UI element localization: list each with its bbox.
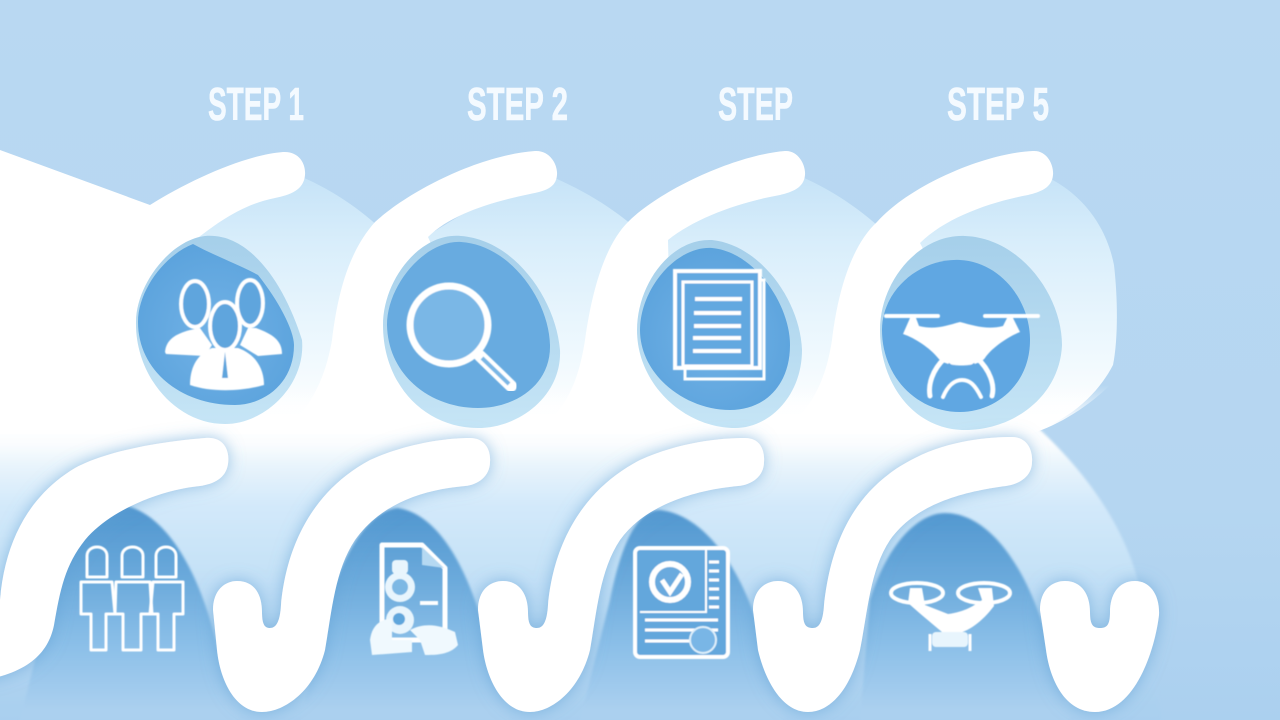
panel: step 1 drop [136, 236, 302, 424]
panel: lower blue arches [20, 505, 1070, 720]
heading: step labels [208, 78, 1049, 130]
panel: lower white arms [0, 437, 1159, 712]
icon: certificate with check [635, 548, 728, 657]
icon: team of three people [165, 280, 282, 390]
panel: lower pale wave [0, 425, 1165, 720]
panel: step 2 drop [383, 236, 560, 428]
heading: step labels: STEP 5 [947, 78, 1049, 130]
panel: upper white arms [0, 150, 1053, 434]
icon: document stack [675, 271, 764, 379]
white band blend [0, 385, 1110, 434]
panel: step 4 drop [880, 236, 1062, 430]
heading: step labels: STEP 2 [467, 78, 568, 130]
icon: magnifying glass [410, 286, 511, 386]
panel: upper pale lobes [170, 170, 1117, 432]
heading: step labels: STEP [718, 78, 793, 130]
icon: document with camera and hands [370, 545, 458, 655]
panel: step 3 drop [637, 240, 802, 428]
icon: three standing figures [81, 547, 183, 650]
icon: small drone from above [891, 583, 1010, 651]
icon: drone [886, 316, 1038, 397]
heading: step labels: STEP 1 [208, 78, 304, 130]
